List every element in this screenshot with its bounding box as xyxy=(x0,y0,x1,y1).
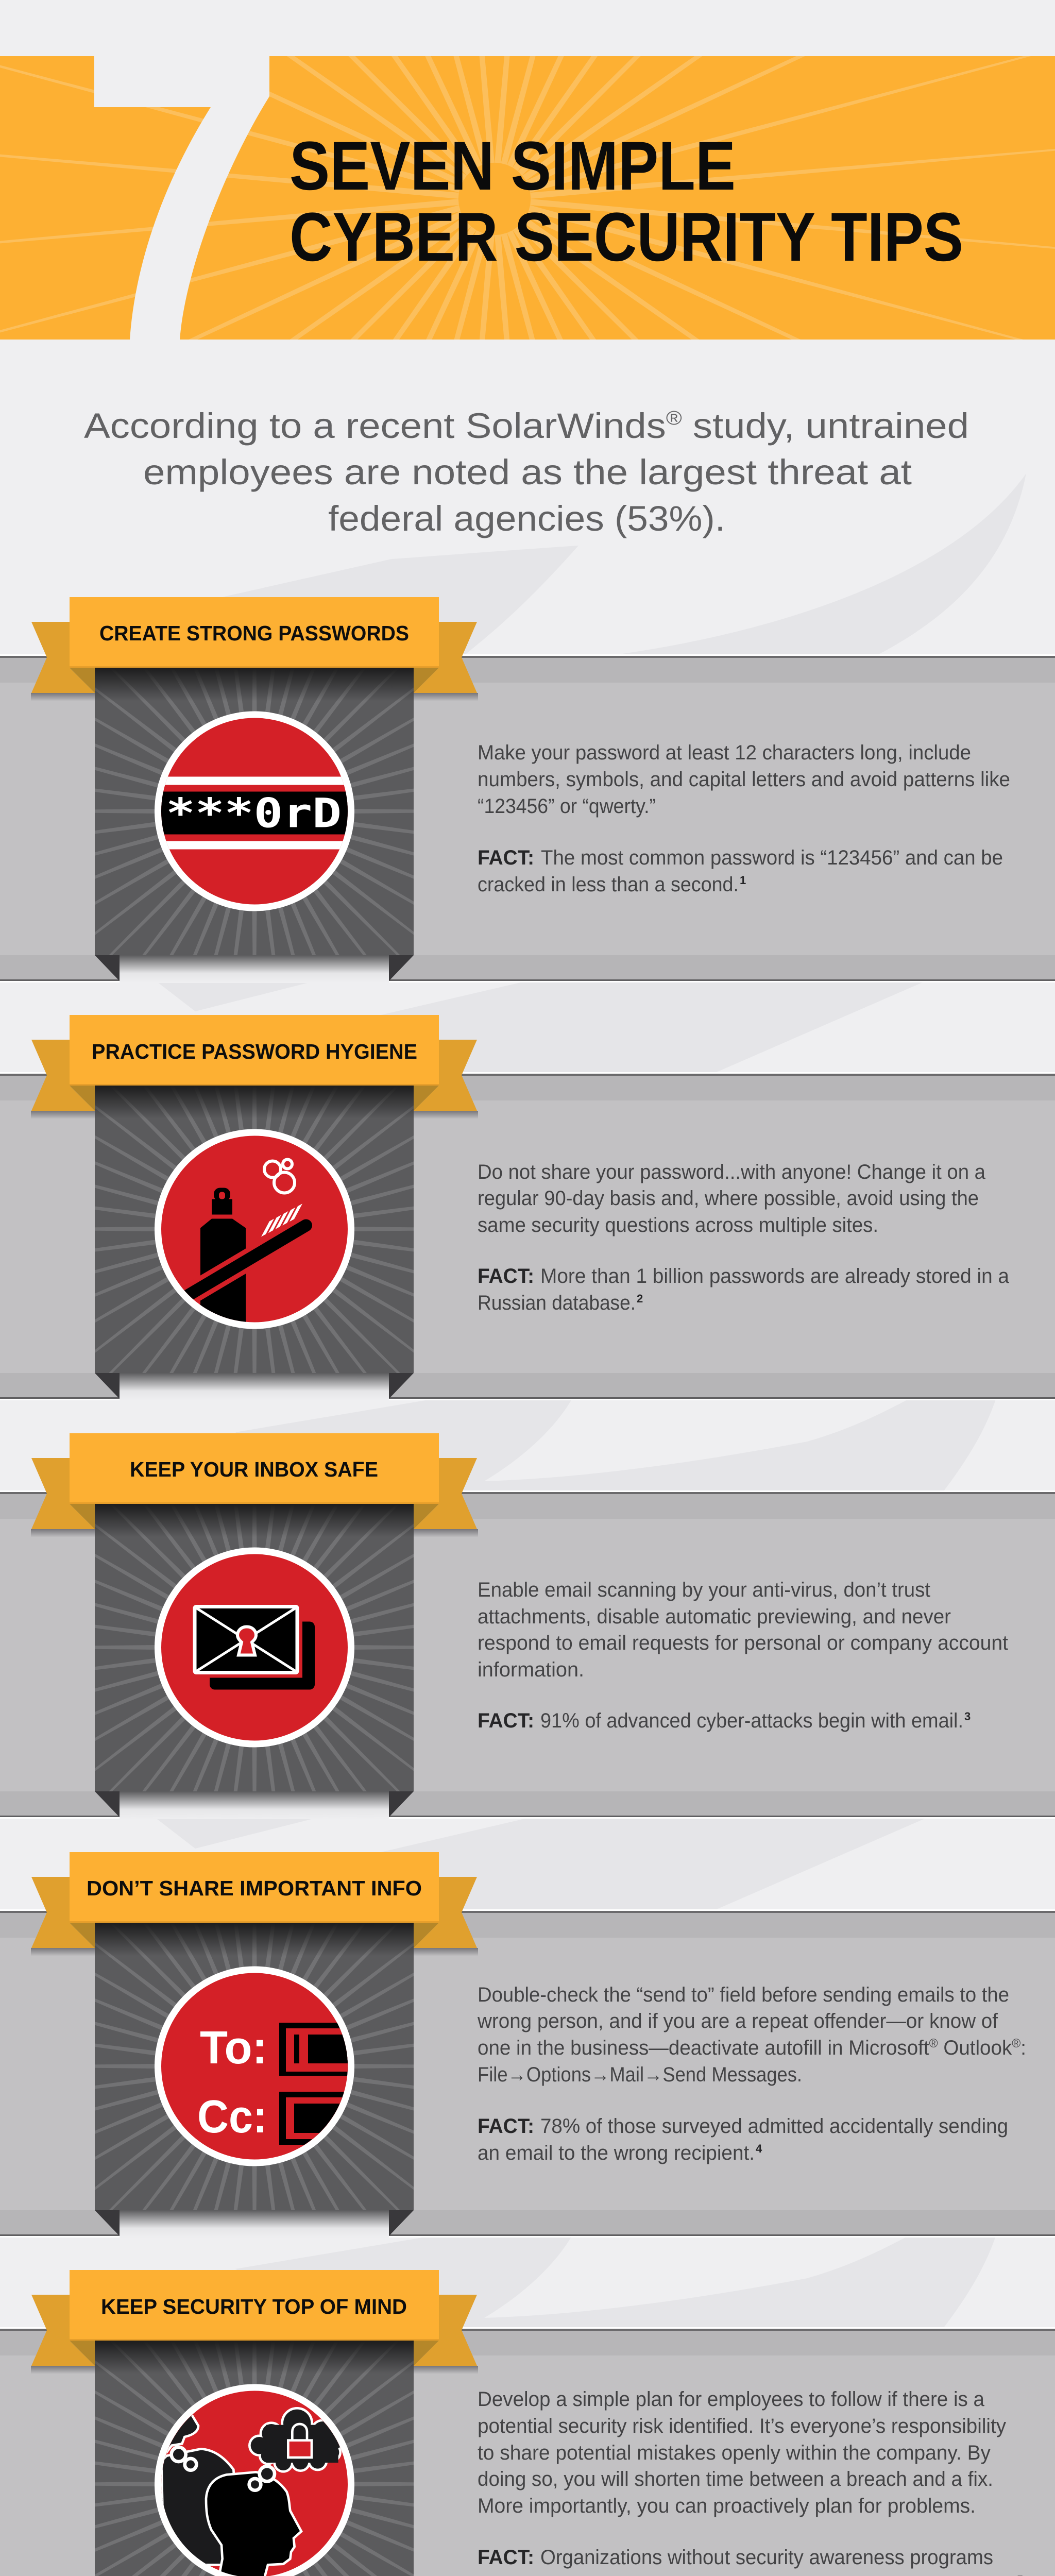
intro text: federal agencies (53%). xyxy=(328,499,725,538)
tip text: Outlook xyxy=(938,2037,1012,2059)
icon: masked password xyxy=(157,777,352,849)
tip text: Develop a simple plan for employees to follow if there is a xyxy=(478,2388,985,2411)
big numeral seven cut-out xyxy=(94,52,269,361)
tip text: “123456” or “qwerty.” xyxy=(478,795,656,818)
heading: KEEP SECURITY TOP OF MIND xyxy=(101,2295,407,2318)
tip text: FACT: xyxy=(478,2546,534,2569)
tip text: one in the business—deactivate autofill in Microsoft xyxy=(478,2037,946,2059)
tip text: doing so, you will shorten time between a breach and a fix. xyxy=(478,2468,993,2490)
icon: masked password: ***0rD xyxy=(166,790,342,837)
tip text: respond to email requests for personal or company account xyxy=(478,1632,1008,1654)
intro text: ® xyxy=(666,408,682,429)
heading: DON’T SHARE IMPORTANT INFO xyxy=(87,1876,422,1900)
tip text: to share potential mistakes openly within the company. By xyxy=(478,2442,991,2464)
panel: don't share important info xyxy=(0,1852,1055,2238)
tip text: Organizations without security awareness programs xyxy=(540,2546,993,2569)
tip text xyxy=(477,1984,1026,2164)
tip text: Make your password at least 12 characters long, include xyxy=(478,741,971,764)
tip text: cracked in less than a second. xyxy=(478,873,739,896)
tip text xyxy=(478,1579,1008,1732)
tip text: Russian database. xyxy=(478,1292,636,1314)
header banner xyxy=(0,56,1055,340)
tip text: 91% of advanced cyber-attacks begin with email. xyxy=(540,1709,963,1732)
tip text: More importantly, you can proactively plan for problems. xyxy=(478,2495,976,2517)
tip text: Do not share your password...with anyone! Change it on a xyxy=(478,1161,986,1183)
tip text: ® xyxy=(929,2037,938,2050)
tip text: wrong person, and if you are a repeat offender—or know of xyxy=(477,2010,998,2032)
tip text xyxy=(478,1161,1010,1314)
heading: KEEP YOUR INBOX SAFE xyxy=(130,1458,378,1481)
tip text: 78% of those surveyed admitted accidentally sending xyxy=(540,2115,1008,2138)
tip text: 2 xyxy=(637,1292,643,1305)
intro text: employees are noted as the largest threat at xyxy=(143,452,912,492)
tip text: numbers, symbols, and capital letters and avoid patterns like xyxy=(478,768,1010,791)
tip text: same security questions across multiple sites. xyxy=(478,1214,878,1236)
tip text: 3 xyxy=(964,1710,971,1723)
icon: to and cc fields: To: xyxy=(200,2022,267,2074)
tip text: 1 xyxy=(740,874,746,887)
tip text: FACT: xyxy=(478,1709,534,1732)
tip text: attachments, disable automatic previewing, and never xyxy=(478,1605,951,1628)
intro text: study, untrained xyxy=(682,406,969,446)
tip text: The most common password is “123456” and can be xyxy=(541,846,1003,869)
tip text: More than 1 billion passwords are already stored in a xyxy=(540,1265,1010,1287)
intro text: According to a recent SolarWinds xyxy=(84,406,611,446)
panel: practice password hygiene xyxy=(0,1015,1055,1400)
tip text: FACT: xyxy=(478,2115,534,2138)
tip text: 4 xyxy=(756,2142,762,2155)
tip text: File→Options→Mail→Send Messages. xyxy=(478,2063,802,2086)
tip text: Double-check the “send to” field before sending emails to the xyxy=(478,1984,1009,2006)
icon: to and cc fields xyxy=(197,2022,362,2145)
title xyxy=(290,128,963,276)
icon: locked envelope xyxy=(190,1601,315,1690)
tip text: regular 90-day basis and, where possible, avoid using the xyxy=(478,1187,979,1210)
tip text: Enable email scanning by your anti-virus, don’t trust xyxy=(478,1579,930,1601)
tip text: potential security risk identified. It’s everyone’s responsibility xyxy=(478,2415,1006,2437)
tip text xyxy=(478,741,1010,896)
icon: to and cc fields: Cc: xyxy=(197,2091,267,2143)
panel: create strong passwords xyxy=(0,597,1055,983)
tip text: ® xyxy=(1012,2037,1021,2050)
title: SEVEN SIMPLE xyxy=(290,128,736,205)
tip text: an email to the wrong recipient. xyxy=(478,2142,755,2164)
tip text xyxy=(478,2388,1023,2576)
icon: heads with thought clouds xyxy=(161,2410,344,2576)
icon: toothpaste and toothbrush xyxy=(181,1158,312,1322)
heading: CREATE STRONG PASSWORDS xyxy=(99,621,409,645)
title: CYBER SECURITY TIPS xyxy=(290,199,963,276)
tip text: FACT: xyxy=(478,1265,534,1287)
background swoosh shapes xyxy=(155,473,1026,2576)
panel: keep your inbox safe xyxy=(0,1421,1055,1874)
tip text: FACT: xyxy=(478,846,534,869)
tip text: information. xyxy=(478,1658,584,1681)
heading: PRACTICE PASSWORD HYGIENE xyxy=(92,1040,417,1063)
tip text: : xyxy=(1020,2037,1026,2059)
panel: keep security top of mind xyxy=(0,2258,1055,2576)
intro text xyxy=(84,406,969,538)
